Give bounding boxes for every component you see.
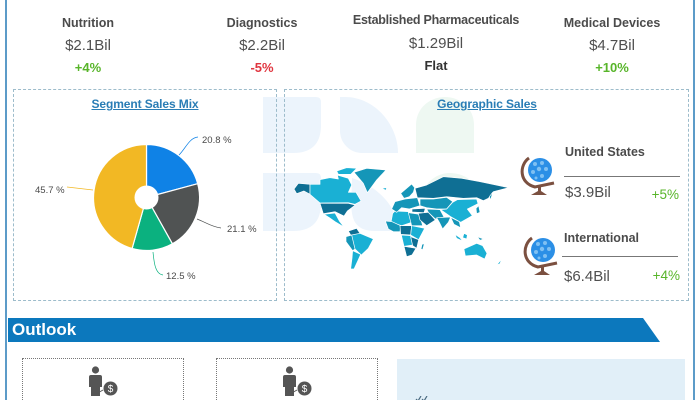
heading: geographic sales: Geographic Sales <box>437 97 537 111</box>
panel: segment sales mix <box>13 89 277 301</box>
pie chart: 21.1 % <box>227 224 257 235</box>
label block: International: International <box>564 231 639 245</box>
outlook banner <box>8 318 660 342</box>
south america <box>348 228 360 237</box>
pie chart <box>35 135 257 282</box>
left frame border <box>5 0 7 400</box>
europe and asia <box>415 177 509 201</box>
metric: Established Pharmaceuticals <box>353 13 519 73</box>
label block: United States <box>564 145 680 202</box>
metric: Nutrition: +4% <box>75 60 101 75</box>
metric: Medical Devices: +10% <box>595 60 629 75</box>
metric: Nutrition: Nutrition <box>62 16 114 30</box>
outlook box 1 <box>22 358 184 400</box>
label block: International: +4% <box>653 268 680 283</box>
world map <box>294 168 508 269</box>
pie chart: 12.5 % <box>166 271 196 282</box>
icon: person with dollar <box>89 366 118 396</box>
label block: United States: $3.9Bil <box>565 184 611 201</box>
outlook commentary panel <box>397 359 685 400</box>
metric: Established Pharmaceuticals: $1.29Bil <box>409 35 463 52</box>
label block: International: $6.4Bil <box>564 268 610 285</box>
africa <box>391 211 412 226</box>
label block: United States: +5% <box>652 187 679 202</box>
metric: Medical Devices: $4.7Bil <box>589 37 635 54</box>
label block: United States: United States <box>565 145 645 159</box>
outlook box 2 <box>216 358 378 400</box>
right frame border <box>693 0 695 400</box>
metric: Diagnostics: -5% <box>250 60 274 75</box>
icon: double check <box>416 396 428 400</box>
panel: geographic sales <box>284 89 689 301</box>
metric: Medical Devices: Medical Devices <box>564 16 660 30</box>
globe icon: International <box>524 236 558 275</box>
icon: person with dollar: $ <box>302 384 308 395</box>
metric: Diagnostics <box>227 16 297 75</box>
oceania and islands <box>464 243 487 259</box>
pie chart: 45.7 % <box>35 185 65 196</box>
metric: Diagnostics: Diagnostics <box>227 16 297 30</box>
metric: Nutrition: $2.1Bil <box>65 37 111 54</box>
metric: Diagnostics: $2.2Bil <box>239 37 285 54</box>
north america <box>294 183 310 194</box>
metric: Medical Devices <box>564 16 660 75</box>
heading: segment sales mix: Segment Sales Mix <box>91 97 199 111</box>
globe icon: United States <box>520 156 554 195</box>
heading: outlook: Outlook <box>12 320 76 339</box>
metric: Established Pharmaceuticals: Established Pharmaceuticals <box>353 13 519 27</box>
pie chart: 20.8 % <box>202 135 232 146</box>
icon: person with dollar: $ <box>108 384 114 395</box>
label block: International <box>562 231 680 285</box>
metric: Established Pharmaceuticals: Flat <box>424 58 448 73</box>
metric: Nutrition <box>62 16 114 75</box>
icon: person with dollar <box>283 366 312 396</box>
